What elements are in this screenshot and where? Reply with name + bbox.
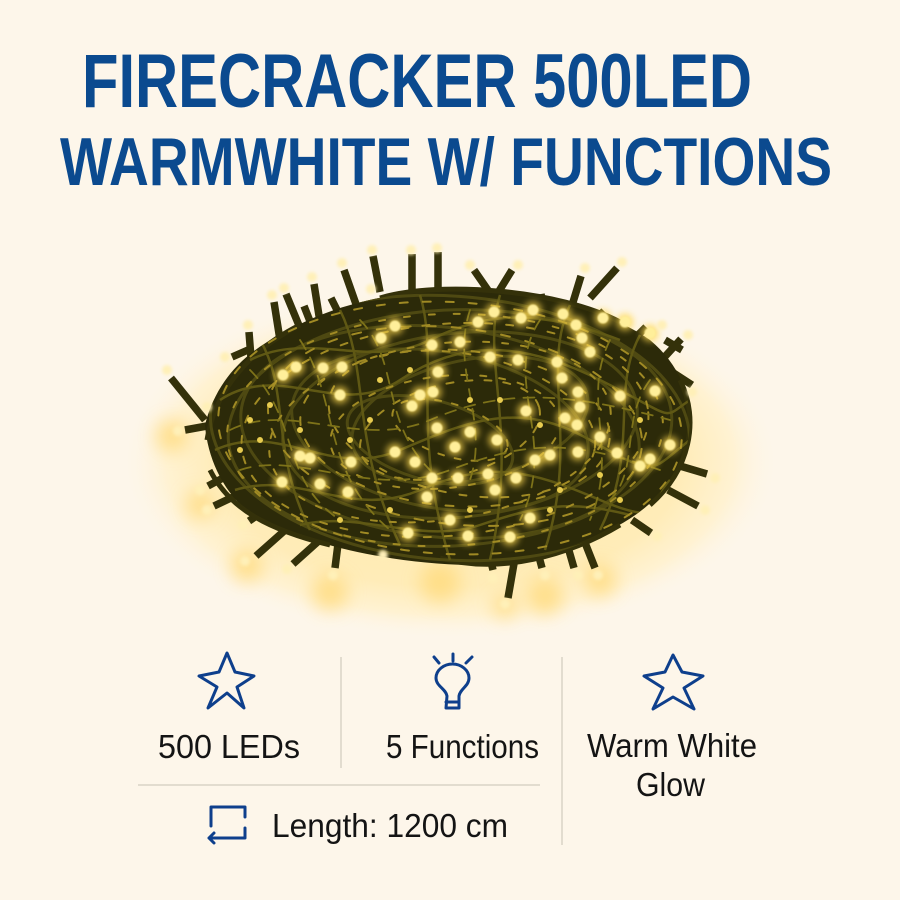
loose outer wire loops [207,289,690,564]
wire coils with highlights [209,294,690,562]
label: Length: Length: 1200 cm [272,807,508,844]
title [60,39,832,200]
label: Warm White Glow: Warm White [587,727,757,764]
small dim LEDs [240,370,640,520]
LED tips on spikes [167,248,715,604]
divider lines [138,657,562,845]
lower halo glows [156,420,616,618]
label: 500 LEDs: 500 LEDs [158,728,300,765]
panel: feature specs [138,653,757,845]
main coil body [205,290,690,565]
icon: star outline [644,655,703,709]
icon: length loop arrow [209,807,245,843]
protruding wire spikes [171,252,707,598]
label: 5 Functions: 5 Functions [386,728,539,765]
product photo: coiled LED string lights [156,248,715,618]
LED bulb halos [282,310,670,537]
LED bulbs inside coil [282,310,670,537]
icon: light bulb [434,654,472,708]
label: Warm White Glow: Glow [636,766,705,803]
icon: star [199,653,254,708]
warm glow behind the lights [120,284,780,640]
label: Warm White Glow [587,727,757,803]
